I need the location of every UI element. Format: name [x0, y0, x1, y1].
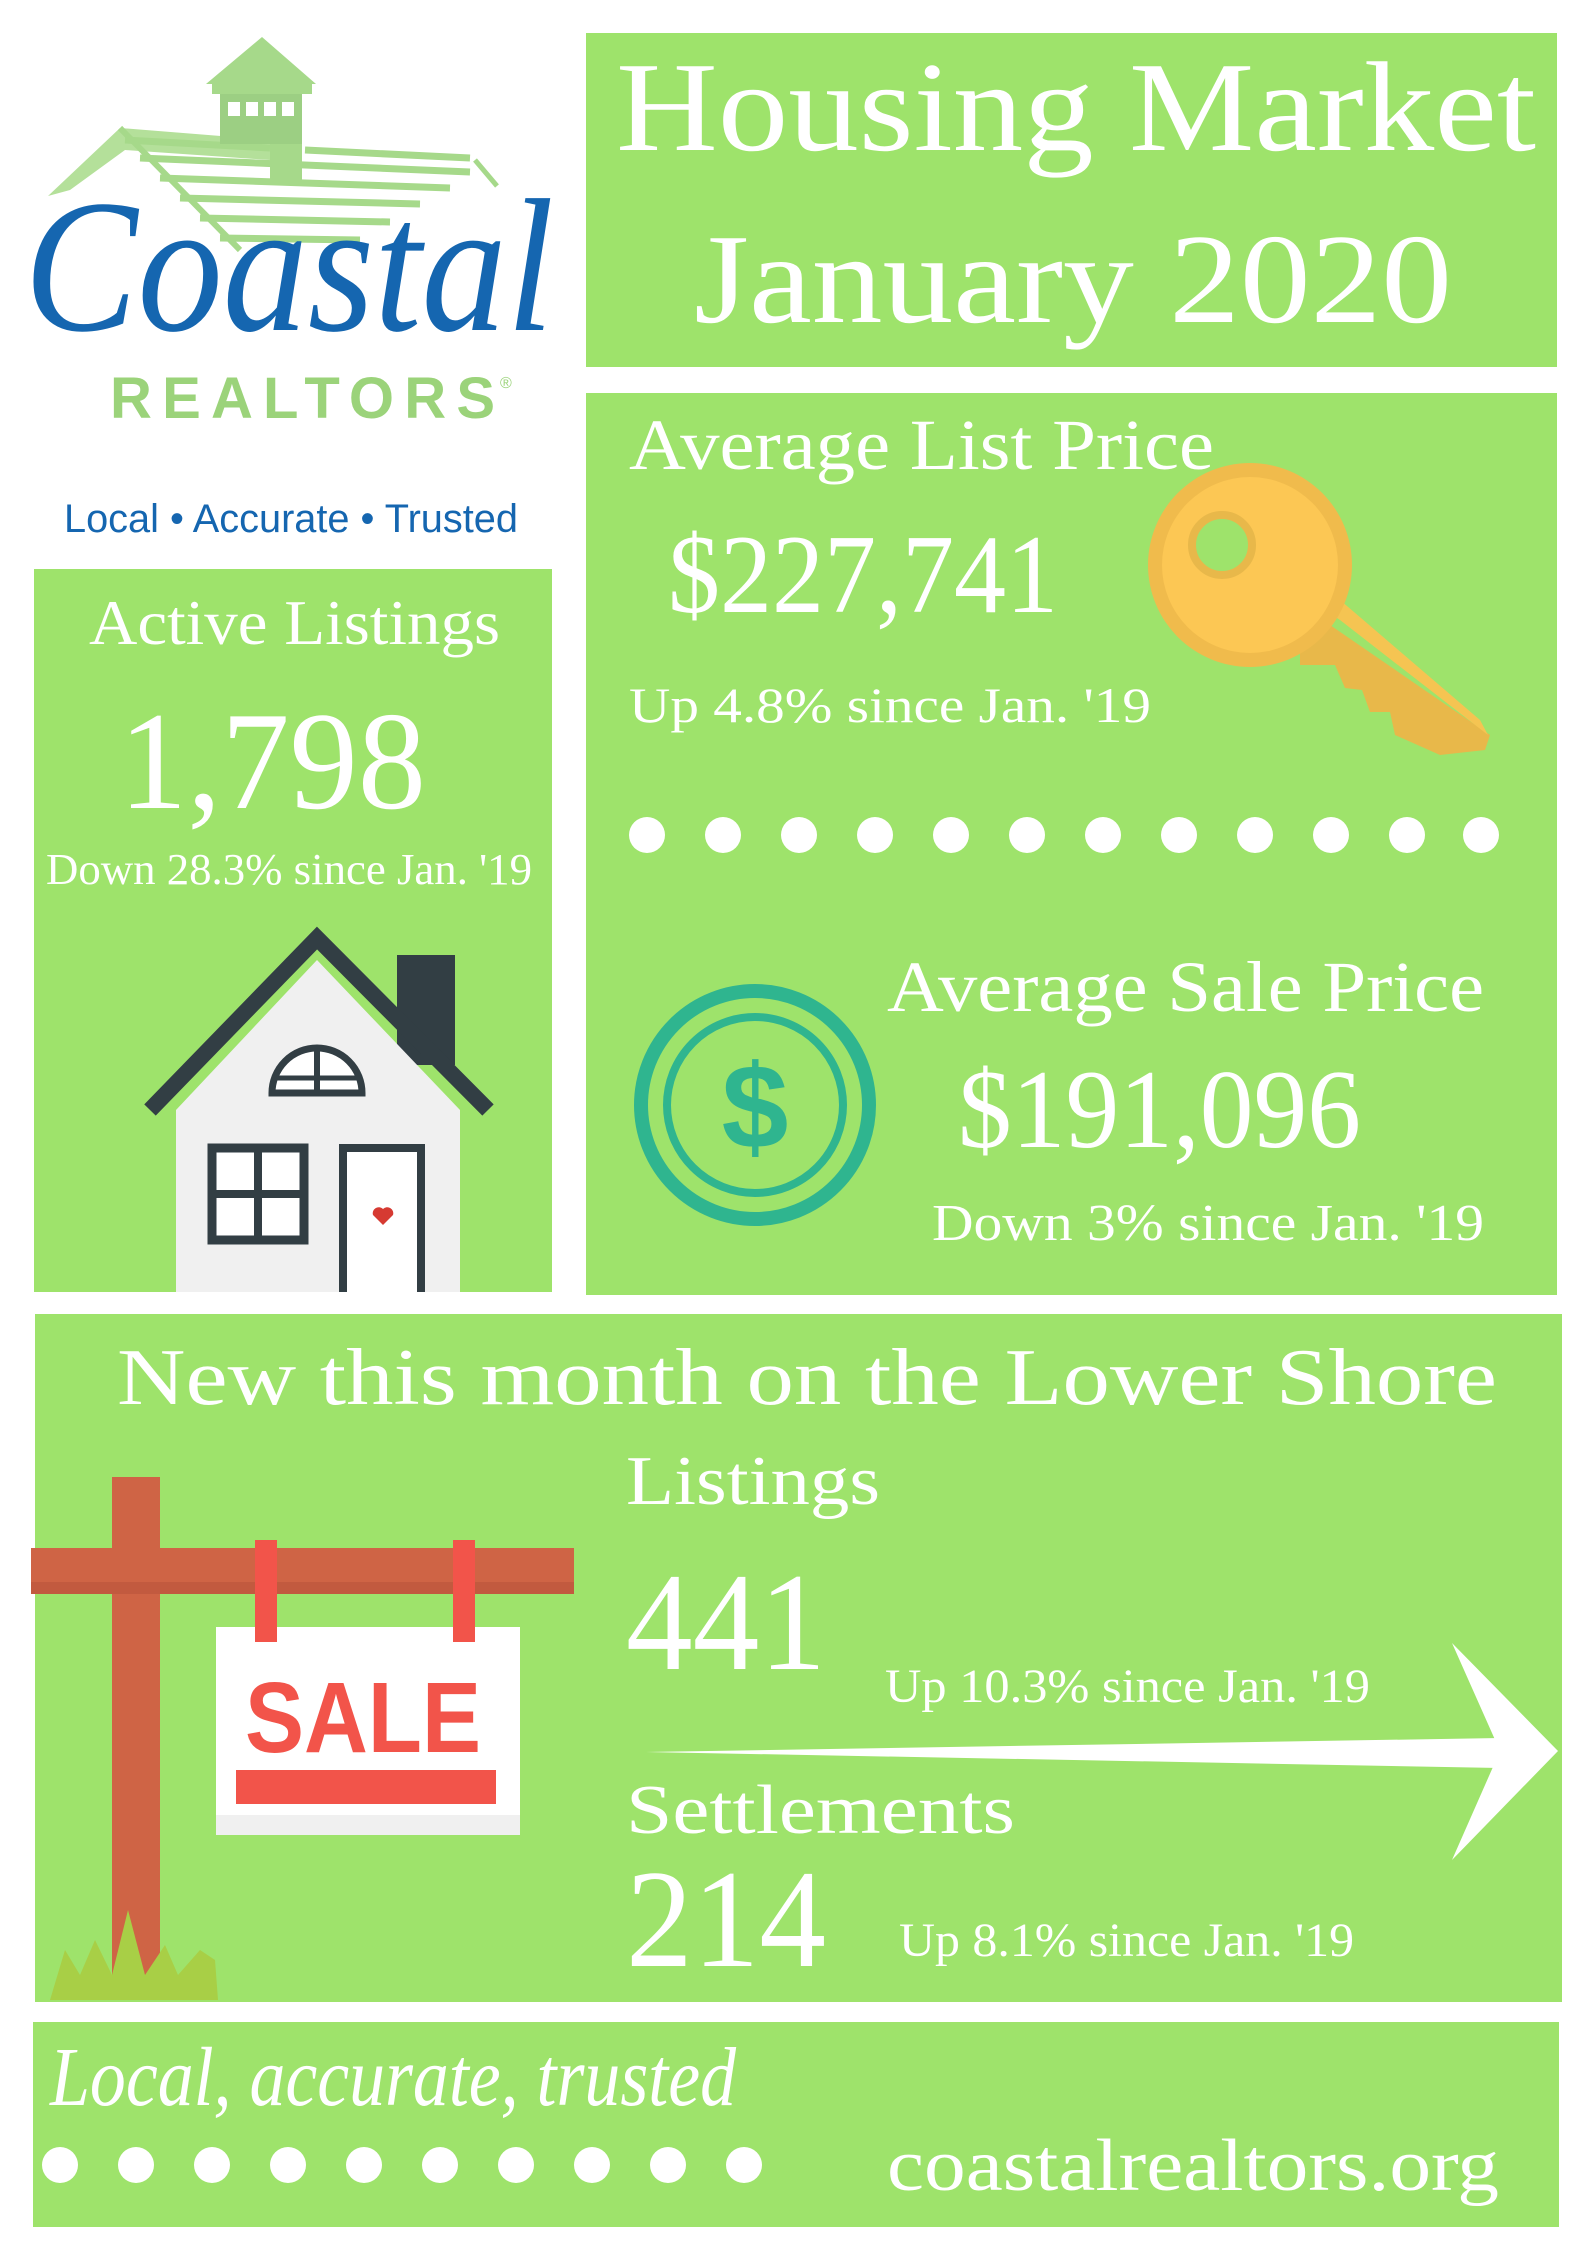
- divider dots: [629, 817, 1499, 853]
- icon: house: [150, 938, 488, 1292]
- tagline script: Local, accurate, trusted: [49, 2031, 737, 2124]
- heading: listings: Listings: [626, 1443, 880, 1520]
- number: sale price: $191,096: [958, 1048, 1361, 1172]
- panel: prices: [586, 393, 1557, 1295]
- text: settlements change: Up 8.1% since Jan. '19: [899, 1914, 1354, 1967]
- logo: ®: [500, 375, 512, 392]
- number: active listings: 1,798: [119, 684, 426, 839]
- text: sale change: Down 3% since Jan. '19: [932, 1195, 1484, 1252]
- number: list price: $227,741: [668, 513, 1058, 637]
- panel: new this month: [31, 1314, 1562, 2002]
- icon: coin: [641, 991, 869, 1219]
- heading: new this month: New this month on the Lower Shore: [117, 1334, 1497, 1422]
- panel: title: [586, 33, 1557, 367]
- text: active change: Down 28.3% since Jan. '19: [46, 845, 532, 894]
- number: settlements: 214: [626, 1842, 826, 1997]
- logo wordmark Coastal: Coastal: [24, 162, 554, 372]
- heading: average sale price: Average Sale Price: [887, 947, 1484, 1027]
- title line 1: Housing Market: [616, 36, 1536, 178]
- tagline: Local • Accurate • Trusted: [64, 497, 518, 541]
- number: listings: 441: [626, 1545, 826, 1700]
- icon: sale sign: [31, 1477, 574, 2000]
- panel: footer: [33, 2022, 1559, 2227]
- website: coastalrealtors.org: [887, 2125, 1499, 2207]
- arrow: [646, 1643, 1558, 1860]
- icon: sale sign: SALE: [245, 1662, 481, 1774]
- text: list change: Up 4.8% since Jan. '19: [629, 677, 1151, 733]
- panel: active listings: [34, 569, 552, 1292]
- heading: settlements: Settlements: [626, 1772, 1015, 1849]
- icon: lighthouse roof: [48, 37, 497, 250]
- footer dots: [42, 2147, 762, 2183]
- text: listings change: Up 10.3% since Jan. '19: [885, 1660, 1370, 1713]
- title line 2: January 2020: [694, 208, 1452, 350]
- icon: coin: $: [722, 1040, 788, 1174]
- logo: [24, 37, 554, 541]
- heading: average list price: Average List Price: [629, 405, 1214, 485]
- icon: key: [1148, 463, 1490, 755]
- logo REALTORS: REALTORS: [110, 366, 495, 431]
- heading: active listings: Active Listings: [89, 587, 500, 658]
